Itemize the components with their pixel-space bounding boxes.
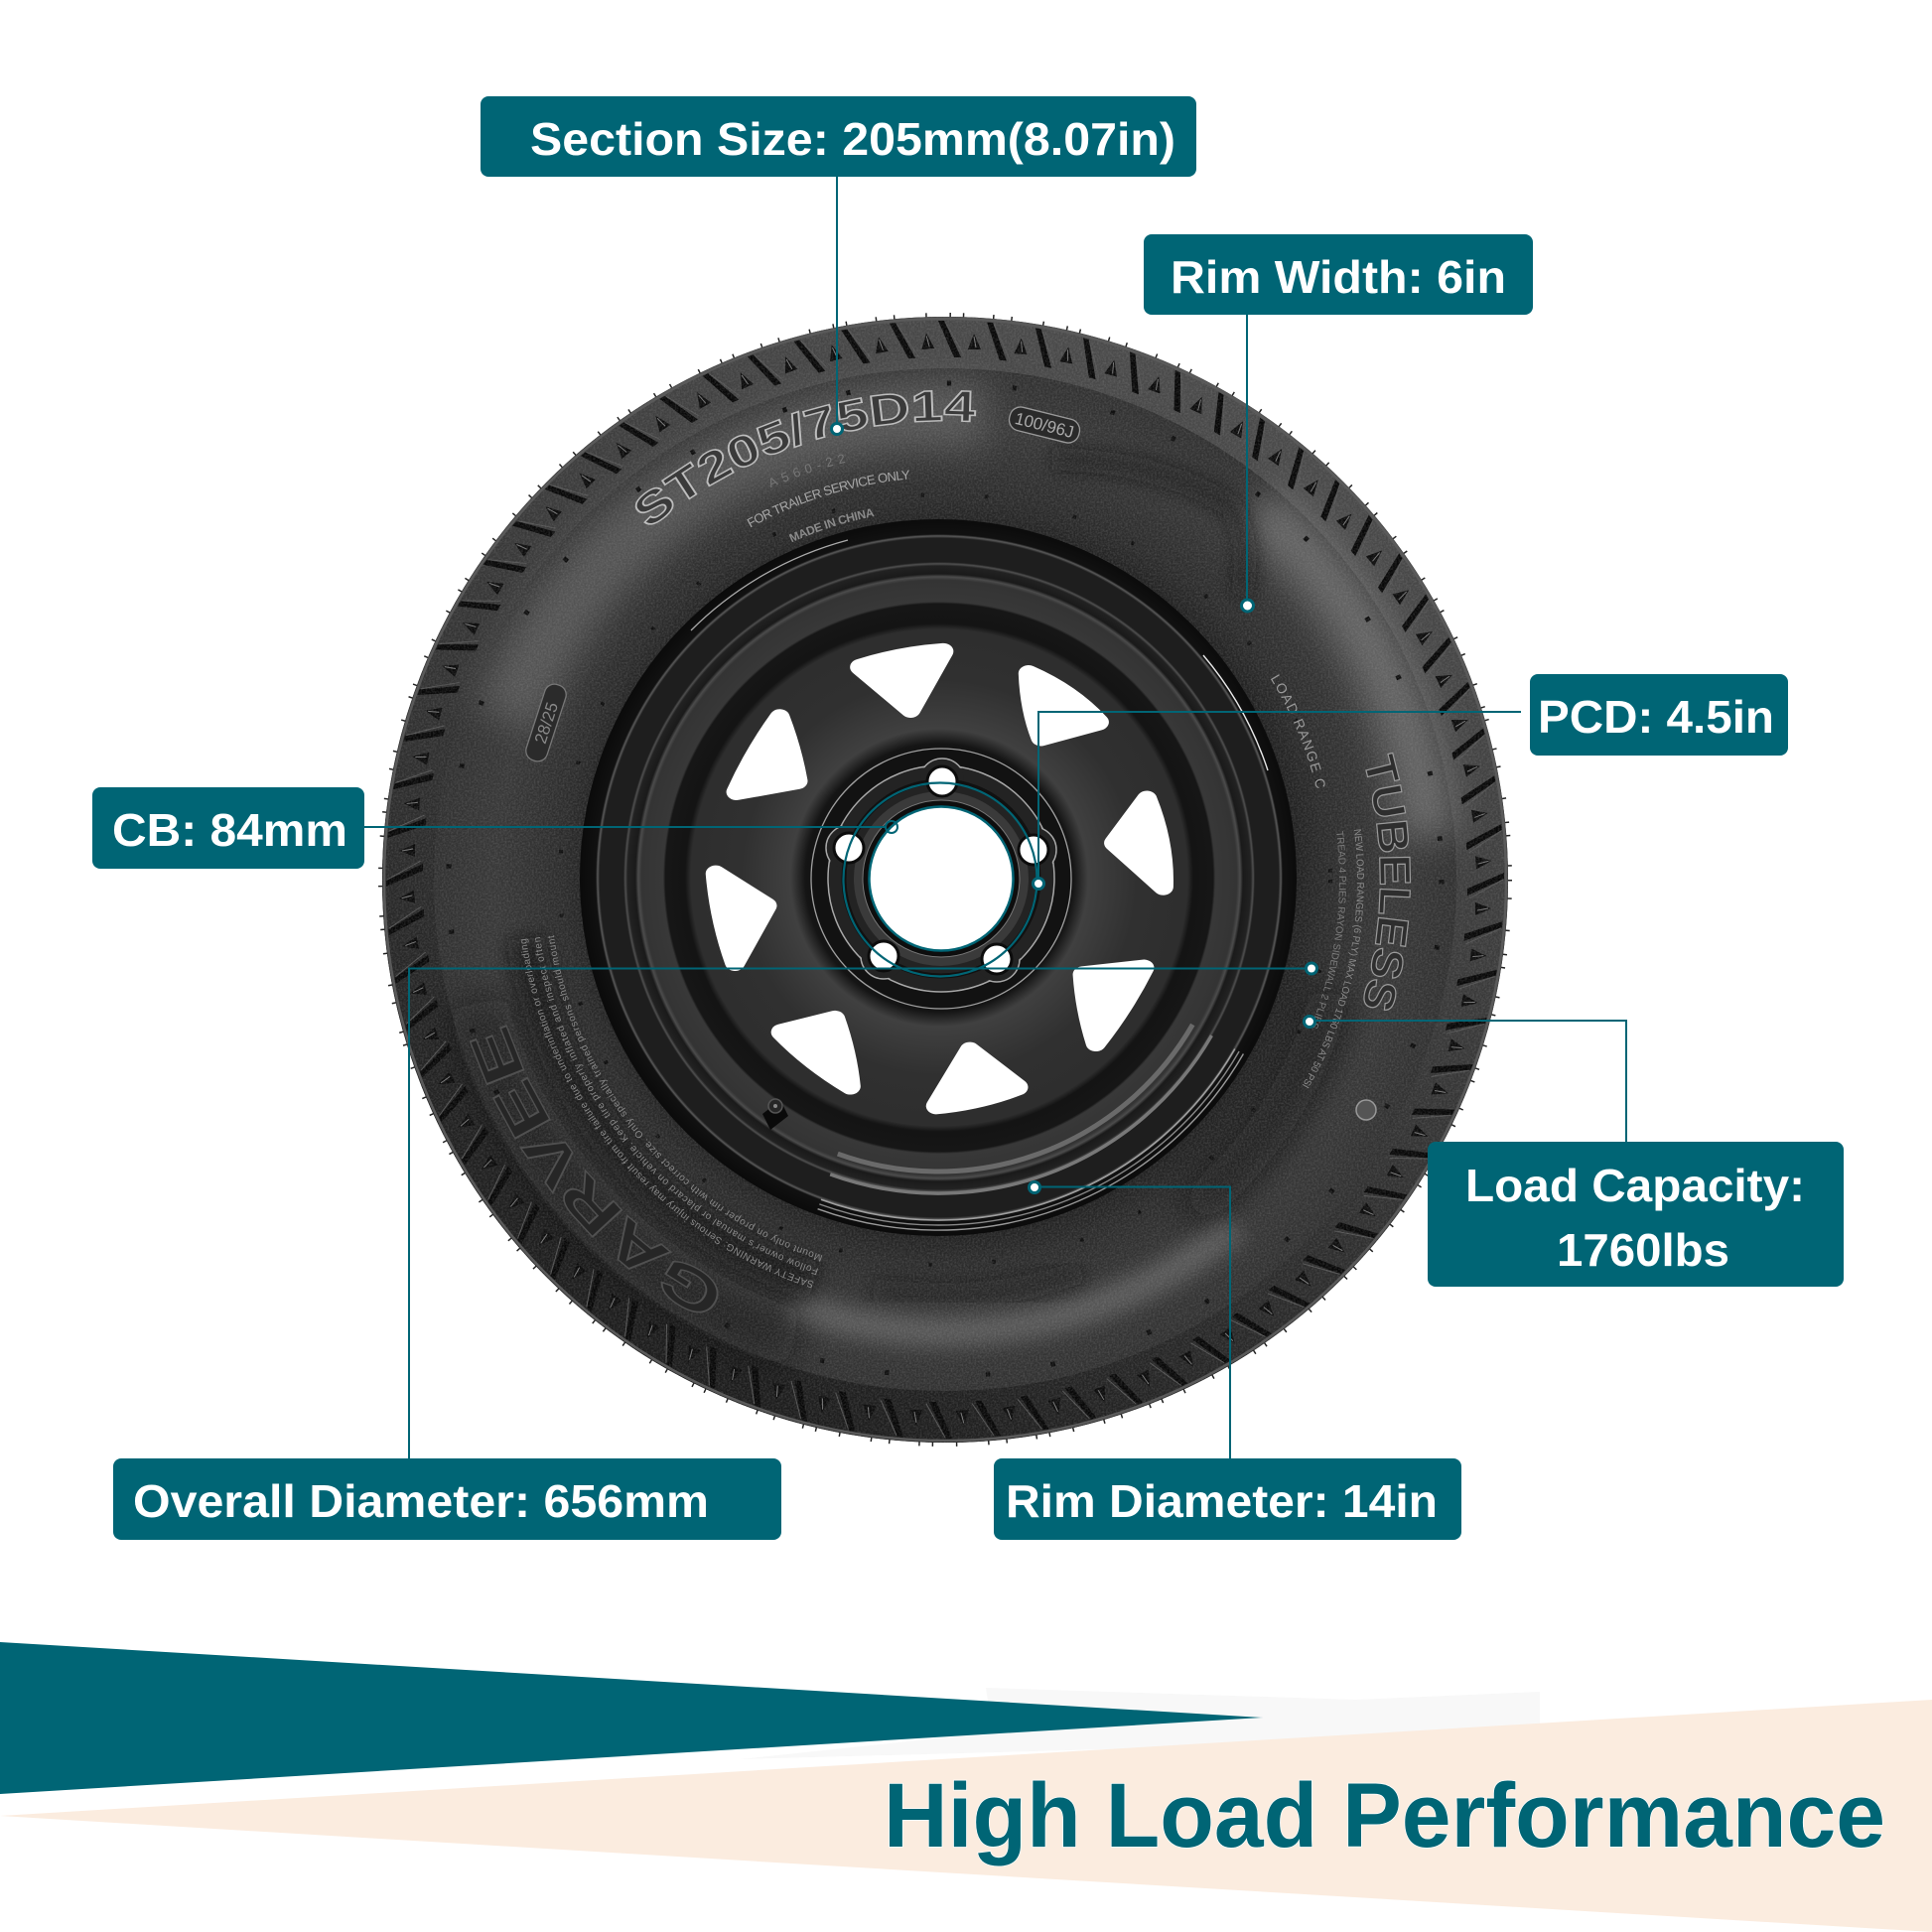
leader: CB — [364, 821, 897, 833]
sidewall marking: safety text: SAFETY WARNING: Serious injury may result from tire failure due to underinflation or overloading — [520, 939, 814, 1288]
label: load capacity — [1428, 1142, 1844, 1287]
label: rim width: Rim Width: 6in — [1171, 251, 1506, 303]
sidewall marking: load range: LOAD RANGE C — [1271, 674, 1325, 788]
sidewall marking: tubeless: TUBELESS — [1363, 753, 1412, 1011]
sidewall marking: origin: MADE IN CHINA — [788, 508, 875, 542]
spoke windows — [716, 651, 1164, 1106]
edge highlight — [384, 319, 1506, 1441]
rim — [580, 519, 1297, 1236]
label: CB — [92, 787, 364, 869]
bolt holes — [834, 766, 1048, 974]
label: load capacity: 1760lbs — [1557, 1224, 1729, 1276]
title: High Load Performance — [884, 1765, 1885, 1866]
recycling mold mark — [1356, 1100, 1376, 1120]
sidewall marking: load index badge — [1007, 405, 1082, 445]
rubber texture — [377, 312, 1513, 1448]
label: section size: Section Size: 205mm(8.07in) — [530, 113, 1175, 165]
leader: load capacity — [1305, 1017, 1626, 1142]
rim highlights — [691, 540, 1268, 1230]
label: rim diameter: Rim Diameter: 14in — [1006, 1475, 1438, 1527]
tread band — [408, 343, 1482, 1417]
label: section size — [481, 96, 1196, 177]
label: PCD: PCD: 4.5in — [1538, 691, 1774, 743]
leader: rim diameter — [1029, 1181, 1230, 1458]
faint shadow remnant — [740, 1688, 1540, 1759]
sidewall nipples — [449, 383, 1442, 1376]
label: CB: CB: 84mm — [112, 804, 347, 856]
sidewall marking: date badge: 28/25 — [531, 700, 562, 746]
tire and wheel photo — [378, 313, 1512, 1447]
label: PCD — [1530, 674, 1788, 756]
sidewall marking: safety text: Mount only on proper rim with correct size. Only specially trained persons should mount — [548, 935, 822, 1262]
center bore — [870, 806, 1013, 951]
sidewall marking: date badge — [523, 682, 569, 763]
sidewall marking: ply data: NEW LOAD RANGES (6 PLY) MAX LOAD 1760 LBS AT 50 PSI — [1303, 829, 1364, 1088]
label: rim diameter — [994, 1458, 1461, 1540]
sidewall marking: tread data: TREAD 4 PLIES RAYON SIDEWALL 2 PLIES — [1312, 831, 1346, 1029]
tire edge spikes — [381, 316, 1509, 1444]
leader: rim width — [1241, 315, 1253, 612]
sidewall marking: safety text: Follow owner's manual or placard on vehicle. Keep tire properly inflated and inspect often — [535, 937, 818, 1275]
sidewall shading — [377, 312, 1513, 1448]
label: rim width — [1144, 234, 1533, 315]
label: overall diameter: Overall Diameter: 656mm — [133, 1475, 709, 1527]
banner: peach wedge — [0, 1700, 1932, 1932]
leader: PCD — [1033, 712, 1521, 890]
tread lugs — [385, 320, 1505, 1440]
PCD ring — [844, 782, 1036, 977]
sidewall marking: brand: GARVEE — [469, 1025, 719, 1312]
tire body — [382, 317, 1508, 1443]
sidewall marking: load index badge: 100/96J — [1013, 409, 1076, 442]
sidewall marking: trailer service: FOR TRAILER SERVICE ONLY — [747, 471, 909, 528]
leader: section size — [832, 177, 842, 435]
hub — [811, 749, 1071, 1009]
sidewall marking: tire size: ST205/75D14 — [635, 390, 977, 525]
banner: teal wedge — [0, 1642, 1263, 1794]
label: overall diameter — [113, 1458, 781, 1540]
valve stem — [762, 1099, 788, 1130]
label: load capacity: Load Capacity: — [1465, 1160, 1805, 1211]
sidewall marking: code: A560-22 — [770, 455, 846, 488]
leader: overall diameter — [409, 963, 1316, 1458]
